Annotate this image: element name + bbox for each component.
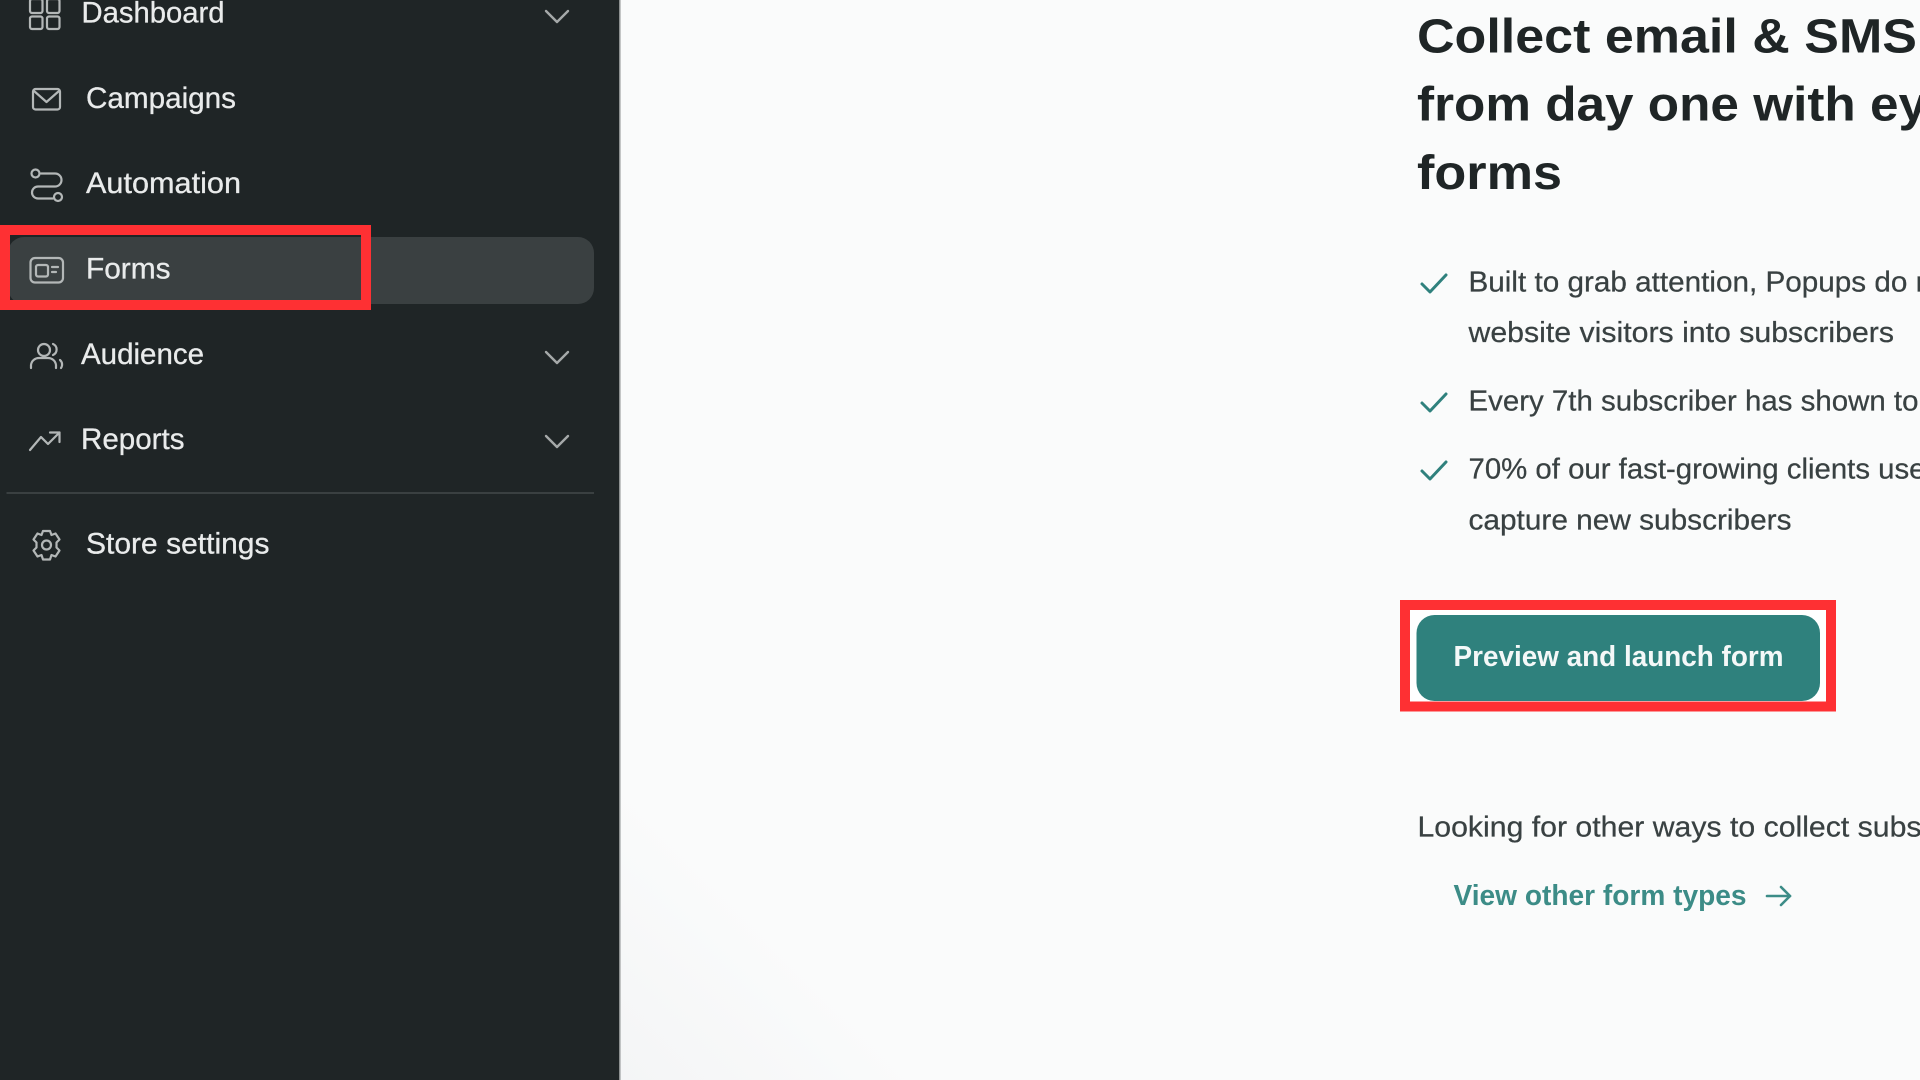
label: Store settings: Store settings <box>86 528 270 560</box>
benefit 1 text: Built to grab attention, Popups do r <box>1468 266 1920 298</box>
highlight box with button <box>1405 605 1831 706</box>
text: other ways prompt: Looking for other ways to collect subs <box>1418 812 1920 844</box>
nav item: Reports <box>30 423 568 456</box>
nav item: Forms <box>30 252 170 286</box>
benefit 3 text: 70% of our fast-growing clients use <box>1468 454 1920 486</box>
button: Preview and launch form: Preview and launch form <box>1454 641 1784 673</box>
icon: envelope <box>33 89 60 110</box>
icon: check <box>1422 462 1446 479</box>
benefit 2 text: Every 7th subscriber has shown to <box>1468 386 1918 418</box>
icon: chevron <box>546 436 568 447</box>
nav item: Store settings <box>34 528 270 560</box>
highlight box: Forms nav item <box>5 230 366 305</box>
nav item: Audience <box>31 338 568 371</box>
heading <box>1417 10 1920 200</box>
panel: sidebar <box>0 0 620 1080</box>
link: View other form types: View other form types <box>1454 880 1746 912</box>
benefit 3 <box>1422 454 1920 536</box>
heading: from day one with ey <box>1417 78 1920 132</box>
benefit list <box>1422 266 1920 536</box>
label: Campaigns: Campaigns <box>86 82 236 115</box>
icon: check <box>1422 275 1446 292</box>
icon: trending chart <box>30 432 60 450</box>
panel: main content background <box>620 0 1920 1080</box>
benefit 3 text: capture new subscribers <box>1468 504 1792 536</box>
label: Reports: Reports <box>81 423 184 456</box>
nav item: Campaigns <box>33 82 236 115</box>
icon: dashboard grid <box>30 0 60 29</box>
benefit 1 <box>1422 266 1920 349</box>
label: Forms: Forms <box>86 252 170 286</box>
heading: Collect email & SMS <box>1417 10 1917 64</box>
label: Audience: Audience <box>81 338 204 371</box>
benefit 3 text <box>1468 454 1920 536</box>
benefit 2 <box>1422 386 1918 418</box>
button: Preview and launch form <box>1416 615 1820 701</box>
benefit 1 text: website visitors into subscribers <box>1467 317 1894 349</box>
nav item: Dashboard <box>30 0 568 30</box>
icon: gear <box>34 531 60 560</box>
icon: form card <box>30 258 63 282</box>
icon: chevron <box>546 11 568 22</box>
icon: automation flow <box>32 170 62 201</box>
icon: check <box>1422 394 1446 411</box>
nav item: Automation <box>32 167 241 201</box>
label: Automation: Automation <box>86 167 241 200</box>
heading: forms <box>1417 147 1562 200</box>
active item highlight: Forms <box>8 237 594 304</box>
icon: arrow <box>1767 887 1790 905</box>
icon: people <box>31 344 62 368</box>
icon: chevron <box>546 352 568 363</box>
benefit 1 text <box>1467 266 1920 349</box>
